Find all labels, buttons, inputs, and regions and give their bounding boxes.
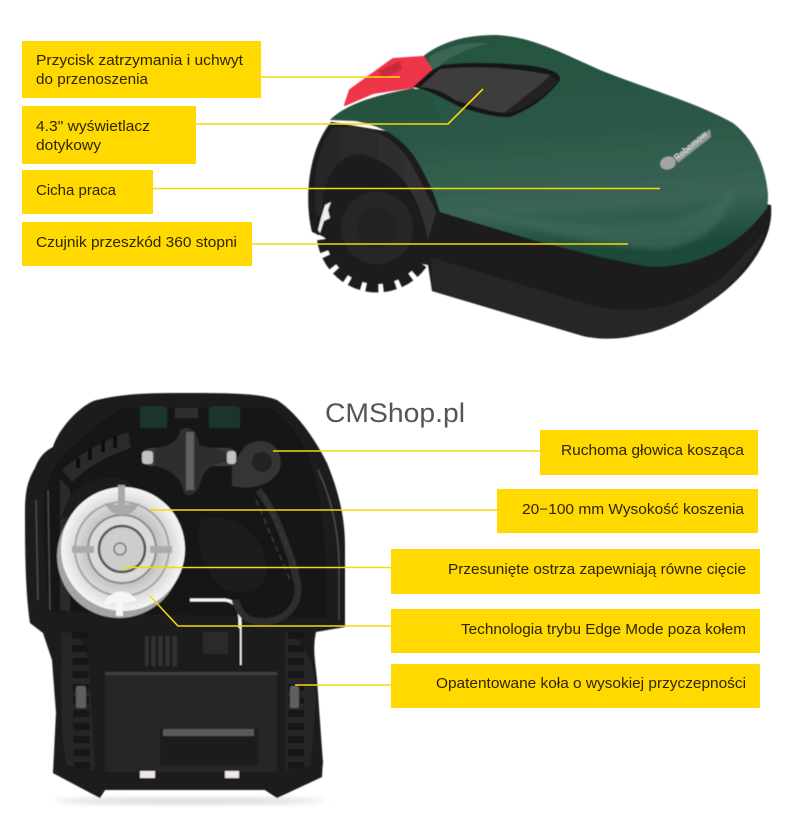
label: stop button and handle bbox=[22, 41, 261, 98]
rear bumper bbox=[53, 760, 323, 798]
sensor windows bbox=[140, 406, 167, 428]
label: touch display bbox=[22, 106, 196, 164]
leader line: wheels bbox=[295, 684, 391, 686]
brand badge bbox=[658, 129, 711, 172]
label: edge mode: Technologia trybu Edge Mode poza kołem bbox=[461, 622, 746, 638]
label: touch display: dotykowy bbox=[36, 138, 102, 154]
inner cover ribs bbox=[235, 490, 298, 622]
leader line: cutting height bbox=[150, 509, 497, 511]
leader line: quiet operation bbox=[153, 188, 660, 190]
display window bbox=[413, 63, 560, 117]
leader line: offset blades bbox=[122, 566, 391, 568]
leader line: floating head bbox=[273, 450, 540, 452]
label: edge mode bbox=[391, 609, 760, 653]
wheel teeth bbox=[322, 177, 432, 287]
watermark: CMShop.pl: CMShop.pl bbox=[325, 398, 465, 428]
floating head wheel bbox=[142, 428, 281, 495]
rear battery cover bbox=[105, 672, 277, 772]
base lower band bbox=[432, 232, 765, 338]
fender rim bbox=[315, 127, 436, 240]
black base and fender bbox=[308, 122, 771, 339]
label: quiet operation: Cicha praca bbox=[36, 183, 117, 199]
image: mower underside view bbox=[25, 393, 345, 804]
outer body bbox=[25, 393, 345, 798]
red stop button bbox=[345, 57, 432, 105]
label: floating cutting head bbox=[540, 430, 758, 475]
image: green robotic mower, angled view bbox=[308, 35, 771, 339]
leader line: display bbox=[196, 89, 483, 124]
label: cutting height bbox=[497, 489, 758, 533]
label: patented wheels bbox=[391, 664, 760, 708]
label: obstacle sensor: Czujnik przeszkód 360 stopni bbox=[36, 235, 237, 251]
green shell bbox=[330, 35, 768, 268]
label: stop button and handle: do przenoszenia bbox=[36, 72, 149, 88]
label: offset blades bbox=[391, 549, 760, 594]
leader line: edge mode bbox=[150, 596, 391, 626]
shell lower sheen bbox=[450, 190, 735, 250]
label: cutting height: 20−100 mm Wysokość koszenia bbox=[522, 502, 745, 518]
label: patented wheels: Opatentowane koła o wysokiej przyczepności bbox=[436, 676, 746, 692]
front fender over button bbox=[330, 88, 440, 122]
shell underside edge bbox=[640, 208, 770, 292]
body inner cavity bbox=[44, 408, 327, 618]
leader line: stop button bbox=[261, 76, 400, 78]
gearbox bbox=[118, 628, 240, 670]
left ribs bbox=[60, 432, 136, 612]
label: offset blades: Przesunięte ostrza zapewniają równe cięcie bbox=[448, 562, 746, 578]
wire loop bbox=[190, 600, 240, 665]
leader line: obstacle sensor bbox=[252, 243, 628, 245]
handle ridge bbox=[428, 43, 490, 70]
label: floating cutting head: Ruchoma głowica kosząca bbox=[561, 443, 745, 459]
body rim highlights bbox=[36, 470, 339, 620]
wheels bbox=[61, 632, 316, 770]
label: obstacle sensor bbox=[22, 222, 252, 266]
label: touch display: 4.3" wyświetlacz bbox=[36, 119, 150, 135]
floor shadow bbox=[55, 798, 325, 804]
label: stop button and handle: Przycisk zatrzymania i uchwyt bbox=[36, 53, 243, 69]
blade disc bbox=[57, 485, 185, 618]
brand badge: Robomow bbox=[672, 129, 710, 163]
wheel face bbox=[318, 180, 429, 284]
label: quiet operation bbox=[22, 170, 153, 214]
